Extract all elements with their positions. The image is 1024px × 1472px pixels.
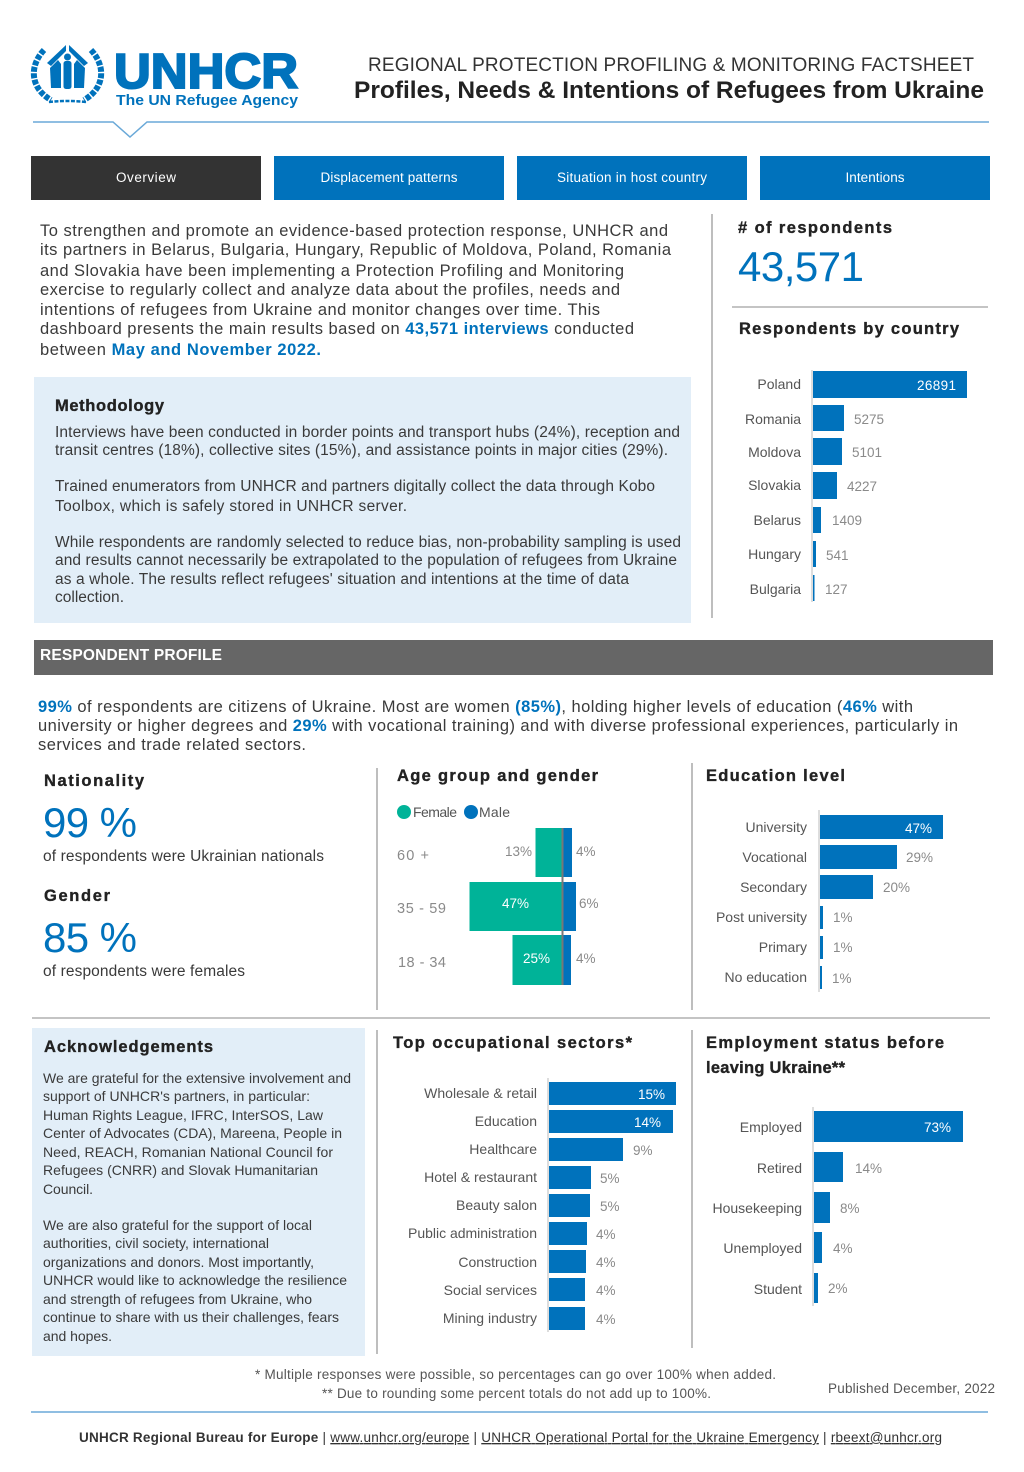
intro paragraph: dashboard presents the main results based on 43,571 interviews conducted	[40, 320, 634, 338]
stat: number of respondents: # of respondents	[738, 219, 892, 237]
footer contact line: UNHCR Regional Bureau for Europe | www.unhcr.org/europe | UNHCR Operational Portal for the Ukraine Emergency | rbeext@unhcr.org	[79, 1430, 942, 1445]
panel: methodology: and results cannot necessarily be extrapolated to the population of refugees from Ukraine	[55, 552, 677, 569]
bar chart: top occupational sectors: 9%	[633, 1143, 653, 1158]
chart: age group and gender: 60 +	[397, 848, 429, 864]
bar chart: top occupational sectors: 14%	[634, 1115, 661, 1130]
stat: gender: Gender	[44, 887, 111, 905]
bar chart: respondents by country: Hungary	[748, 546, 801, 562]
chart: age group and gender: 4%	[576, 951, 596, 966]
stat: nationality: Nationality	[44, 772, 145, 790]
bar chart: respondents by country: 541	[826, 548, 849, 563]
panel: acknowledgements: and hopes.	[43, 1328, 112, 1344]
bar chart: respondents by country	[739, 320, 967, 602]
header title: REGIONAL PROTECTION PROFILING & MONITORING FACTSHEET	[368, 55, 974, 76]
tab: overview	[31, 156, 261, 200]
navigation tabs	[31, 156, 990, 200]
publication date: Published December, 2022	[828, 1381, 995, 1396]
chart: age group and gender: 18 - 34	[398, 955, 446, 971]
panel: methodology: Methodology	[55, 397, 165, 415]
chart: age group and gender	[397, 767, 599, 985]
legend: Male	[479, 804, 510, 820]
intro paragraph: intentions of refugees from Ukraine and monitor changes over time. This	[40, 301, 600, 319]
header logo: UNHCR: UNHCR	[114, 45, 298, 99]
legend	[397, 804, 510, 820]
stat: nationality	[43, 772, 324, 865]
intro paragraph: exercise to regularly collect and analyze data about the profiles, needs and	[40, 281, 620, 299]
panel: acknowledgements: Acknowledgements	[44, 1038, 213, 1056]
tab: overview: Overview	[116, 170, 176, 185]
bar chart: top occupational sectors: Beauty salon	[456, 1197, 537, 1213]
footnotes	[255, 1367, 776, 1401]
bar chart: top occupational sectors: Wholesale & retail	[424, 1085, 537, 1101]
header title	[354, 55, 984, 104]
panel: acknowledgements: organizations and donors. Most importantly,	[43, 1254, 314, 1270]
bar chart: employment status: Employment status before	[706, 1034, 944, 1052]
tab: displacement patterns	[274, 156, 504, 200]
bar chart: education level: No education	[724, 969, 807, 985]
bar chart: top occupational sectors: 4%	[596, 1283, 616, 1298]
stat: gender: 85 %	[43, 914, 137, 961]
bar chart: education level: 1%	[832, 971, 852, 986]
profile summary text: 99% of respondents are citizens of Ukraine. Most are women (85%), holding higher levels of education (46% with	[38, 698, 913, 716]
section band: respondent profile	[34, 640, 993, 675]
footer rule	[31, 1411, 988, 1413]
intro paragraph: To strengthen and promote an evidence-based protection response, UNHCR and	[40, 222, 668, 240]
stat: gender: of respondents were females	[43, 963, 245, 980]
panel: acknowledgements: We are also grateful for the support of local	[43, 1217, 312, 1233]
bar chart: education level: 1%	[833, 910, 853, 925]
bar chart: respondents by country: 1409	[832, 513, 862, 528]
footnotes: ** Due to rounding some percent totals do not add up to 100%.	[322, 1386, 711, 1401]
panel: acknowledgements	[32, 1028, 365, 1356]
intro paragraph	[40, 222, 672, 359]
panel: acknowledgements: Council.	[43, 1181, 93, 1197]
bar chart: top occupational sectors	[393, 1034, 676, 1332]
bar chart: education level: 47%	[905, 821, 932, 836]
bar chart: education level: Vocational	[742, 849, 807, 865]
intro paragraph: its partners in Belarus, Bulgaria, Hungary, Republic of Moldova, Poland, Romania	[40, 241, 672, 259]
bar chart: top occupational sectors: Public administration	[408, 1225, 537, 1241]
bar chart: top occupational sectors: Construction	[458, 1254, 537, 1270]
chart: age group and gender: 6%	[579, 896, 599, 911]
bar chart: education level: 1%	[833, 940, 853, 955]
chart: age group and gender: Age group and gender	[397, 767, 599, 785]
tab: situation in host country	[517, 156, 747, 200]
bar chart: employment status: 73%	[924, 1120, 951, 1135]
tab: displacement patterns: Displacement patterns	[320, 170, 458, 185]
bar chart: top occupational sectors: Top occupational sectors*	[393, 1034, 633, 1052]
profile summary text: university or higher degrees and 29% with vocational training) and with diverse professional experiences, particularly in	[38, 717, 958, 735]
bar chart: employment status: Housekeeping	[712, 1200, 802, 1216]
chart: age group and gender: 13%	[505, 844, 532, 859]
panel: acknowledgements: Human Rights League, IFRC, InterSOS, Law	[43, 1107, 324, 1123]
icon: UNHCR laurel emblem	[34, 45, 101, 102]
stat: gender	[43, 887, 245, 980]
bar chart: respondents by country: 4227	[847, 479, 877, 494]
panel: methodology: Toolbox, which is safely stored in UNHCR server.	[55, 498, 407, 515]
panel: acknowledgements: We are grateful for the extensive involvement and	[43, 1070, 351, 1086]
panel: acknowledgements: and strength of refugees from Ukraine, who	[43, 1291, 312, 1307]
panel: acknowledgements: Need, REACH, Romanian National Council for	[43, 1144, 333, 1160]
header logo: UNHCR: The UN Refugee Agency	[116, 92, 299, 109]
panel: acknowledgements: UNHCR would like to acknowledge the resilience	[43, 1272, 347, 1288]
bar chart: respondents by country: Respondents by country	[739, 320, 960, 338]
bar chart: top occupational sectors: Mining industry	[443, 1310, 537, 1326]
intro paragraph: and Slovakia have been implementing a Protection Profiling and Monitoring	[40, 262, 624, 280]
panel: acknowledgements: support of UNHCR's partners, in particular:	[43, 1088, 310, 1104]
bar chart: education level: 29%	[906, 850, 933, 865]
intro paragraph: between May and November 2022.	[40, 341, 321, 359]
bar chart: employment status: Retired	[757, 1160, 802, 1176]
stat: nationality: of respondents were Ukrainian nationals	[43, 848, 324, 865]
stat: number of respondents	[738, 219, 892, 290]
header title: Profiles, Needs & Intentions of Refugees from Ukraine	[354, 77, 984, 104]
panel: methodology: While respondents are randomly selected to reduce bias, non-probability sampling is used	[55, 534, 681, 551]
profile summary text: services and trade related sectors.	[38, 736, 306, 754]
legend: Female	[413, 804, 457, 820]
bar chart: respondents by country: Belarus	[754, 512, 801, 528]
bar chart: respondents by country: 5101	[852, 445, 882, 460]
bar chart: top occupational sectors: Healthcare	[469, 1141, 537, 1157]
tab: intentions: Intentions	[846, 170, 905, 185]
bar chart: education level: 20%	[883, 880, 910, 895]
bar chart: top occupational sectors: 4%	[596, 1312, 616, 1327]
panel: methodology: Trained enumerators from UNHCR and partners digitally collect the data through Kobo	[55, 478, 655, 495]
bar chart: employment status: 8%	[840, 1201, 860, 1216]
bar chart: respondents by country: Moldova	[748, 444, 801, 460]
header rule with arrow	[33, 122, 989, 137]
panel: methodology: Interviews have been conducted in border points and transport hubs (24%), reception and	[55, 424, 680, 441]
tab: situation in host country: Situation in host country	[557, 170, 707, 185]
bar chart: education level	[706, 767, 943, 992]
bar chart: employment status: leaving Ukraine**	[706, 1059, 846, 1077]
section band: respondent profile: RESPONDENT PROFILE	[40, 647, 222, 664]
bar chart: education level: Secondary	[740, 879, 807, 895]
bar chart: top occupational sectors: 5%	[600, 1199, 620, 1214]
bar chart: respondents by country: Romania	[745, 411, 801, 427]
bar chart: top occupational sectors: Social services	[444, 1282, 537, 1298]
bar chart: respondents by country: Bulgaria	[750, 581, 801, 597]
bar chart: respondents by country: 5275	[854, 412, 884, 427]
stat: number of respondents: 43,571	[738, 243, 864, 290]
bar chart: employment status: Student	[754, 1281, 802, 1297]
panel: acknowledgements: Center of Advocates (CDA), Mareena, People in	[43, 1125, 342, 1141]
chart: age group and gender: 35 - 59	[397, 901, 446, 917]
divider	[32, 214, 990, 1354]
bar chart: respondents by country: 26891	[917, 378, 956, 393]
bar chart: top occupational sectors: Hotel & restaurant	[424, 1169, 537, 1185]
bar chart: employment status: Unemployed	[723, 1240, 802, 1256]
bar chart: top occupational sectors: 4%	[596, 1227, 616, 1242]
panel: methodology: collection.	[55, 589, 124, 606]
stat: nationality: 99 %	[43, 799, 137, 846]
bar chart: education level: Primary	[759, 939, 807, 955]
panel: methodology: as a whole. The results reflect refugees' situation and intentions at the time of data	[55, 571, 629, 588]
bar chart: education level: Education level	[706, 767, 845, 785]
chart: age group and gender: 4%	[576, 844, 596, 859]
bar chart: top occupational sectors: Education	[475, 1113, 537, 1129]
bar chart: respondents by country: Poland	[757, 376, 801, 392]
profile summary text	[38, 698, 958, 754]
panel: acknowledgements: continue to share with us their challenges, fears	[43, 1309, 339, 1325]
bar chart: top occupational sectors: 5%	[600, 1171, 620, 1186]
header logo: UNHCR	[34, 45, 299, 109]
bar chart: employment status	[706, 1034, 963, 1306]
panel: methodology	[34, 377, 691, 623]
bar chart: respondents by country: Slovakia	[748, 477, 801, 493]
bar chart: employment status: 14%	[855, 1161, 882, 1176]
chart: age group and gender: 47%	[502, 896, 529, 911]
bar chart: top occupational sectors: 15%	[638, 1087, 665, 1102]
tab: intentions	[760, 156, 990, 200]
bar chart: employment status: 4%	[833, 1241, 853, 1256]
bar chart: employment status: 2%	[828, 1281, 848, 1296]
chart: age group and gender: 25%	[523, 951, 550, 966]
bar chart: respondents by country: 127	[825, 582, 848, 597]
panel: acknowledgements: authorities, civil society, international	[43, 1235, 269, 1251]
bar chart: top occupational sectors: 4%	[596, 1255, 616, 1270]
panel: methodology: transit centres (18%), collective sites (15%), and assistance points in major cities (29%).	[55, 442, 668, 459]
panel: acknowledgements: Refugees (CNRR) and Slovak Humanitarian	[43, 1162, 318, 1178]
bar chart: employment status: Employed	[740, 1119, 802, 1135]
bar chart: education level: University	[746, 819, 807, 835]
footnotes: * Multiple responses were possible, so percentages can go over 100% when added.	[255, 1367, 776, 1382]
bar chart: education level: Post university	[716, 909, 807, 925]
